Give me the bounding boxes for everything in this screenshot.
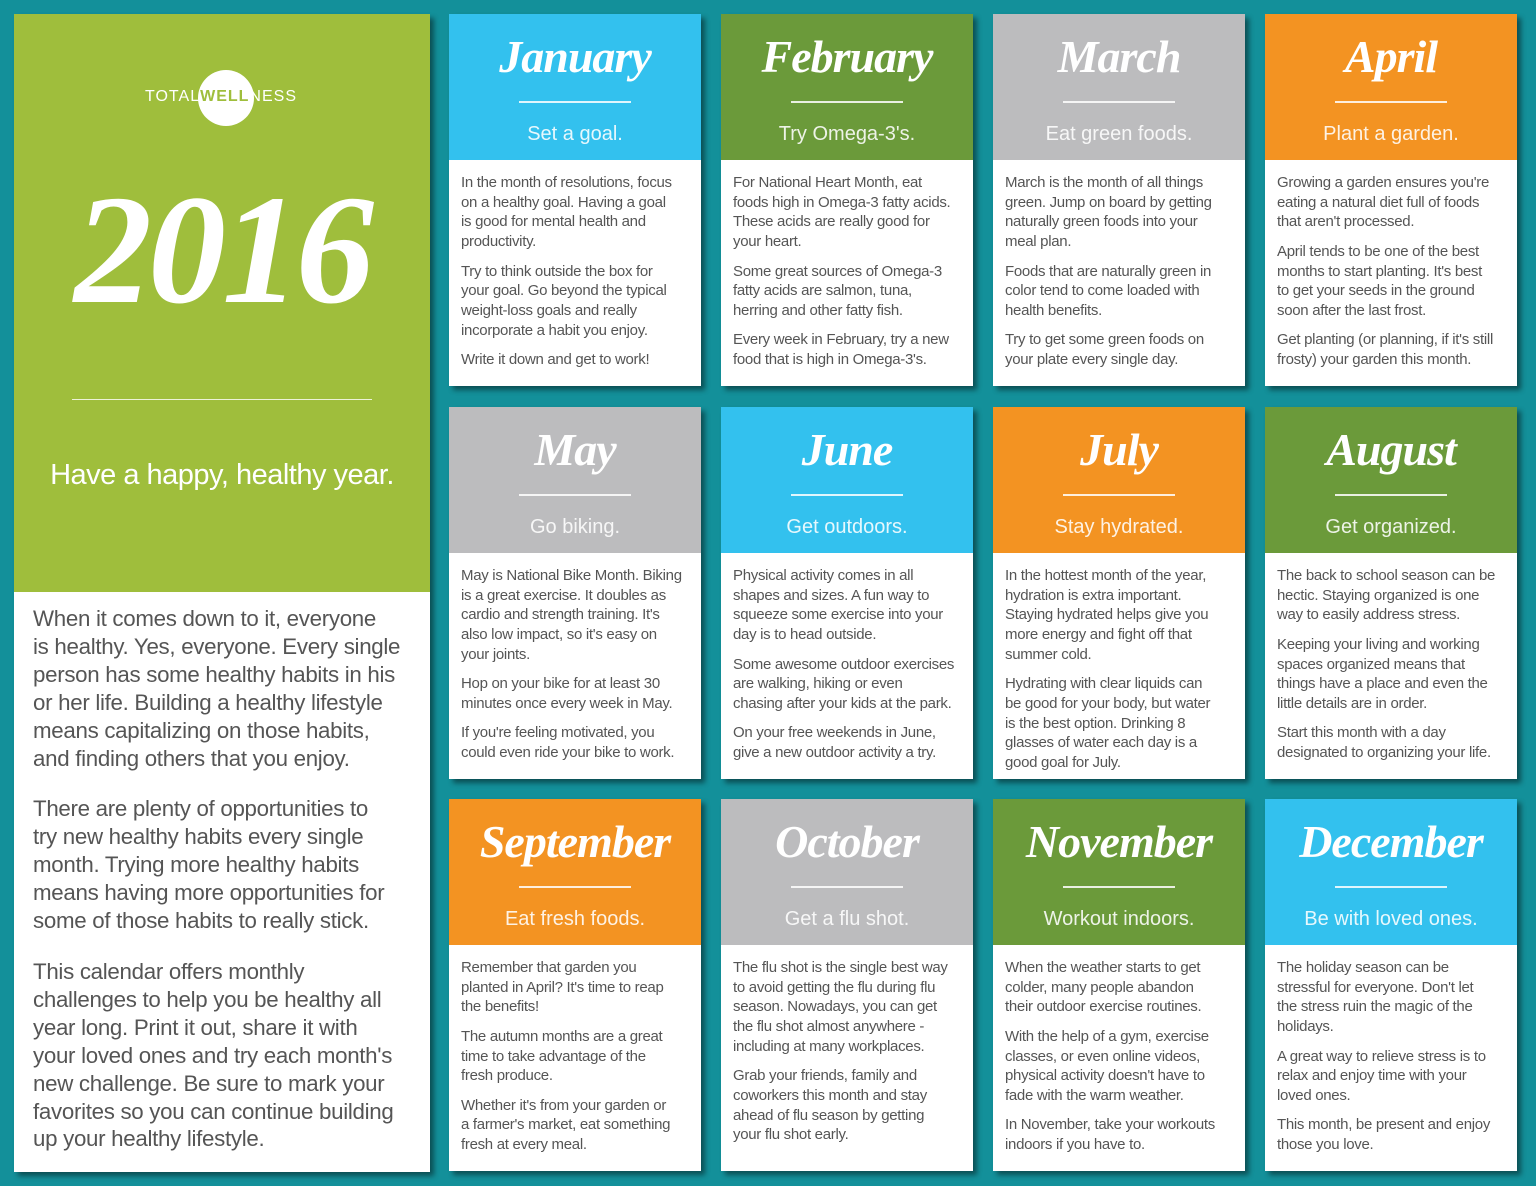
card: November: fade with the warm weather. <box>1005 1087 1184 1104</box>
card: November: November <box>1026 816 1212 867</box>
card: May: your joints. <box>461 646 530 663</box>
card: March: your plate every single day. <box>1005 351 1178 368</box>
card: July: is the best option. Drinking 8 <box>1005 715 1185 732</box>
intro text: When it comes down to it, everyone <box>33 606 376 631</box>
card: December: those you love. <box>1277 1136 1373 1153</box>
card: April: Plant a garden. <box>1323 123 1459 145</box>
card: December <box>1265 799 1517 1171</box>
card: November: With the help of a gym, exercise <box>1005 1028 1209 1045</box>
card: December: Be with loved ones. <box>1304 908 1478 930</box>
intro text: or her life. Building a healthy lifestyle <box>33 690 383 715</box>
card: October: season. Nowadays, you can get <box>733 998 937 1015</box>
card: September <box>449 799 701 1171</box>
card: September: Whether it's from your garden or <box>461 1097 666 1114</box>
intro text: favorites so you can continue building <box>33 1098 393 1124</box>
card: March: March is the month of all things <box>1005 174 1203 191</box>
intro text: try new healthy habits every single <box>33 824 363 849</box>
card: October: October <box>775 816 919 867</box>
card: August: hectic. Staying organized is one <box>1277 587 1479 604</box>
card: December: relax and enjoy time with your <box>1277 1067 1466 1084</box>
intro text: new challenge. Be sure to mark your <box>33 1071 384 1096</box>
card: April: that aren't processed. <box>1277 213 1414 230</box>
intro text: and finding others that you enjoy. <box>33 746 350 771</box>
card: November: In November, take your workouts <box>1005 1116 1215 1133</box>
card: June: June <box>802 424 892 475</box>
intro text: some of those habits to really stick. <box>33 908 369 933</box>
card: June: chasing after your kids at the park. <box>733 695 952 712</box>
card: January: Try to think outside the box for <box>461 262 653 280</box>
card: July: July <box>1080 424 1158 475</box>
card: March: Foods that are naturally green in <box>1005 262 1211 280</box>
card: June <box>721 407 973 779</box>
intro text: This calendar offers monthly <box>33 959 304 984</box>
card: January: In the month of resolutions, focus <box>461 174 672 191</box>
card: August: designated to organizing your life. <box>1277 744 1491 761</box>
card: July: hydration is extra important. <box>1005 587 1181 604</box>
card: May: minutes once every week in May. <box>461 695 672 712</box>
card: June: give a new outdoor activity a try. <box>733 744 936 761</box>
card: March: naturally green foods into your <box>1005 213 1198 230</box>
card: September: the benefits! <box>461 998 539 1015</box>
card: January: your goal. Go beyond the typical <box>461 282 667 299</box>
card: April: to get your seeds in the ground <box>1277 282 1475 299</box>
card: February: Some great sources of Omega-3 <box>733 262 942 280</box>
intro text: means having more opportunities for <box>33 880 384 905</box>
card: June: Get outdoors. <box>786 516 908 538</box>
card: July: good goal for July. <box>1005 754 1121 771</box>
card: March: Try to get some green foods on <box>1005 331 1204 348</box>
card: October: your flu shot early. <box>733 1126 848 1143</box>
card: January: Write it down and get to work! <box>461 351 649 368</box>
card: November: classes, or even online videos, <box>1005 1048 1200 1064</box>
intro text: There are plenty of opportunities to <box>33 796 368 821</box>
card: December: December <box>1299 816 1483 867</box>
card: November: Workout indoors. <box>1044 908 1194 930</box>
panel: intro <box>14 14 430 1172</box>
card: August: little details are in order. <box>1277 695 1427 712</box>
card: May: Go biking. <box>530 516 620 538</box>
header block green <box>14 14 430 592</box>
card: December: A great way to relieve stress is to <box>1277 1048 1486 1064</box>
card: August: spaces organized means that <box>1277 656 1465 672</box>
card: June: are walking, hiking or even <box>733 675 902 692</box>
card: September: The autumn months are a great <box>461 1028 662 1045</box>
card: October: Grab your friends, family and <box>733 1067 917 1084</box>
card: August: Get organized. <box>1325 516 1457 538</box>
card: August: things have a place and even the <box>1277 675 1488 692</box>
card: February: For National Heart Month, eat <box>733 174 922 191</box>
intro text: means capitalizing on those habits, <box>33 718 370 743</box>
card: May: could even ride your bike to work. <box>461 744 674 761</box>
card: January: January <box>499 31 651 82</box>
card: December: This month, be present and enjoy <box>1277 1116 1490 1133</box>
card: March: March <box>1058 31 1180 82</box>
card: June: day is to head outside. <box>733 626 876 643</box>
logo: TOTALWELLNESS <box>145 88 297 105</box>
card: January: incorporate a habit you enjoy. <box>461 322 648 339</box>
card: December: loved ones. <box>1277 1087 1350 1104</box>
card: September: fresh at every meal. <box>461 1136 587 1153</box>
card: July: be good for your body, but water <box>1005 695 1210 712</box>
card: April <box>1265 14 1517 386</box>
card: April: months to start planting. It's best <box>1277 262 1482 280</box>
card: January <box>449 14 701 386</box>
intro text: is healthy. Yes, everyone. Every single <box>33 634 400 659</box>
card: May <box>449 407 701 779</box>
card: May: May is National Bike Month. Biking <box>461 567 682 584</box>
card: October: to avoid getting the flu during flu <box>733 979 935 996</box>
card: August: Keeping your living and working <box>1277 636 1480 653</box>
card: October: the flu shot almost anywhere - <box>733 1018 924 1035</box>
card: July: summer cold. <box>1005 646 1091 663</box>
card: November <box>993 799 1245 1171</box>
card: January: Set a goal. <box>527 123 623 145</box>
intro text: person has some healthy habits in his <box>33 662 395 687</box>
card: December: stressful for everyone. Don't let <box>1277 979 1473 996</box>
card: July: more energy and fight off that <box>1005 626 1192 643</box>
card: May: May <box>534 424 616 475</box>
card: September: Remember that garden you <box>461 959 636 976</box>
card: February: herring and other fatty fish. <box>733 302 903 319</box>
card: February: fatty acids are salmon, tuna, <box>733 282 912 299</box>
card: August: The back to school season can be <box>1277 567 1495 584</box>
intro text: year long. Print it out, share it with <box>33 1015 357 1040</box>
card: April: Growing a garden ensures you're <box>1277 174 1489 191</box>
card: February: Every week in February, try a new <box>733 331 949 348</box>
card: December: the stress ruin the magic of the <box>1277 998 1473 1015</box>
intro text: your loved ones and try each month's <box>33 1043 392 1068</box>
card: January: on a healthy goal. Having a goal <box>461 194 666 211</box>
card: November: indoors if you have to. <box>1005 1136 1145 1153</box>
card: October: including at many workplaces. <box>733 1038 924 1055</box>
card: July: Hydrating with clear liquids can <box>1005 675 1202 692</box>
card: September: time to take advantage of the <box>461 1048 646 1064</box>
card: March <box>993 14 1245 386</box>
card: June: shapes and sizes. A fun way to <box>733 587 929 604</box>
card: March: health benefits. <box>1005 302 1102 319</box>
card: July: Stay hydrated. <box>1055 516 1183 538</box>
card: September: September <box>480 816 670 867</box>
card: April: eating a natural diet full of foods <box>1277 194 1479 211</box>
card: April: frosty) your garden this month. <box>1277 351 1471 368</box>
card: September: a farmer's market, eat something <box>461 1116 670 1133</box>
card: February: These acids are really good for <box>733 213 930 230</box>
card: February <box>721 14 973 386</box>
card: February: Try Omega-3's. <box>779 123 915 145</box>
card: June: squeeze some exercise into your <box>733 606 943 623</box>
card: August <box>1265 407 1517 779</box>
card: April: April <box>1345 31 1437 82</box>
card: June: On your free weekends in June, <box>733 724 936 741</box>
card: August: August <box>1326 424 1456 475</box>
card: February: foods high in Omega-3 fatty acids. <box>733 194 950 211</box>
card: January: is good for mental health and <box>461 213 646 230</box>
card: September: planted in April? It's time to reap <box>461 979 663 996</box>
card: July <box>993 407 1245 779</box>
card: April: Get planting (or planning, if it's still <box>1277 331 1493 348</box>
card: November: When the weather starts to get <box>1005 959 1200 976</box>
card: May: If you're feeling motivated, you <box>461 724 654 741</box>
card: April: soon after the last frost. <box>1277 302 1426 319</box>
card: March: Eat green foods. <box>1046 123 1192 145</box>
card: January: productivity. <box>461 233 536 250</box>
card: July: Staying hydrated helps give you <box>1005 606 1208 623</box>
card: April: April tends to be one of the best <box>1277 243 1479 260</box>
card: February: February <box>762 31 932 82</box>
card: December: holidays. <box>1277 1018 1334 1035</box>
card: May: cardio and strength training. It's <box>461 606 660 623</box>
card: February: your heart. <box>733 233 801 250</box>
card: September: fresh produce. <box>461 1067 553 1084</box>
card: July: glasses of water each day is a <box>1005 734 1197 751</box>
card: October <box>721 799 973 1171</box>
card: November: their outdoor exercise routines. <box>1005 998 1201 1015</box>
card: June: Physical activity comes in all <box>733 567 913 584</box>
card: January: weight-loss goals and really <box>461 302 637 319</box>
card: March: green. Jump on board by getting <box>1005 194 1212 211</box>
card: October: Get a flu shot. <box>785 908 909 930</box>
card: October: ahead of flu season by getting <box>733 1107 924 1124</box>
card: December: The holiday season can be <box>1277 959 1449 976</box>
card: May: also low impact, so it's easy on <box>461 626 657 643</box>
card: November: physical activity doesn't have to <box>1005 1067 1205 1084</box>
card: May: is a great exercise. It doubles as <box>461 587 666 604</box>
card: February: food that is high in Omega-3's. <box>733 351 927 368</box>
card: August: way to easily address stress. <box>1277 606 1460 623</box>
card: September: Eat fresh foods. <box>505 908 645 930</box>
card: October: The flu shot is the single best way <box>733 959 948 976</box>
tagline: Have a happy, healthy year. <box>50 459 394 491</box>
card: July: In the hottest month of the year, <box>1005 567 1206 584</box>
intro text <box>33 606 400 1151</box>
year: 2016 <box>74 163 370 336</box>
card: March: meal plan. <box>1005 233 1071 250</box>
intro text: up your healthy lifestyle. <box>33 1126 264 1151</box>
card: June: Some awesome outdoor exercises <box>733 656 954 672</box>
card: November: colder, many people abandon <box>1005 979 1194 996</box>
card: August: Start this month with a day <box>1277 724 1446 741</box>
intro text: month. Trying more healthy habits <box>33 852 359 877</box>
card: October: coworkers this month and stay <box>733 1087 927 1104</box>
intro text: challenges to help you be healthy all <box>33 987 381 1012</box>
card: May: Hop on your bike for at least 30 <box>461 675 660 692</box>
logo <box>145 70 297 126</box>
card: March: color tend to come loaded with <box>1005 282 1199 299</box>
